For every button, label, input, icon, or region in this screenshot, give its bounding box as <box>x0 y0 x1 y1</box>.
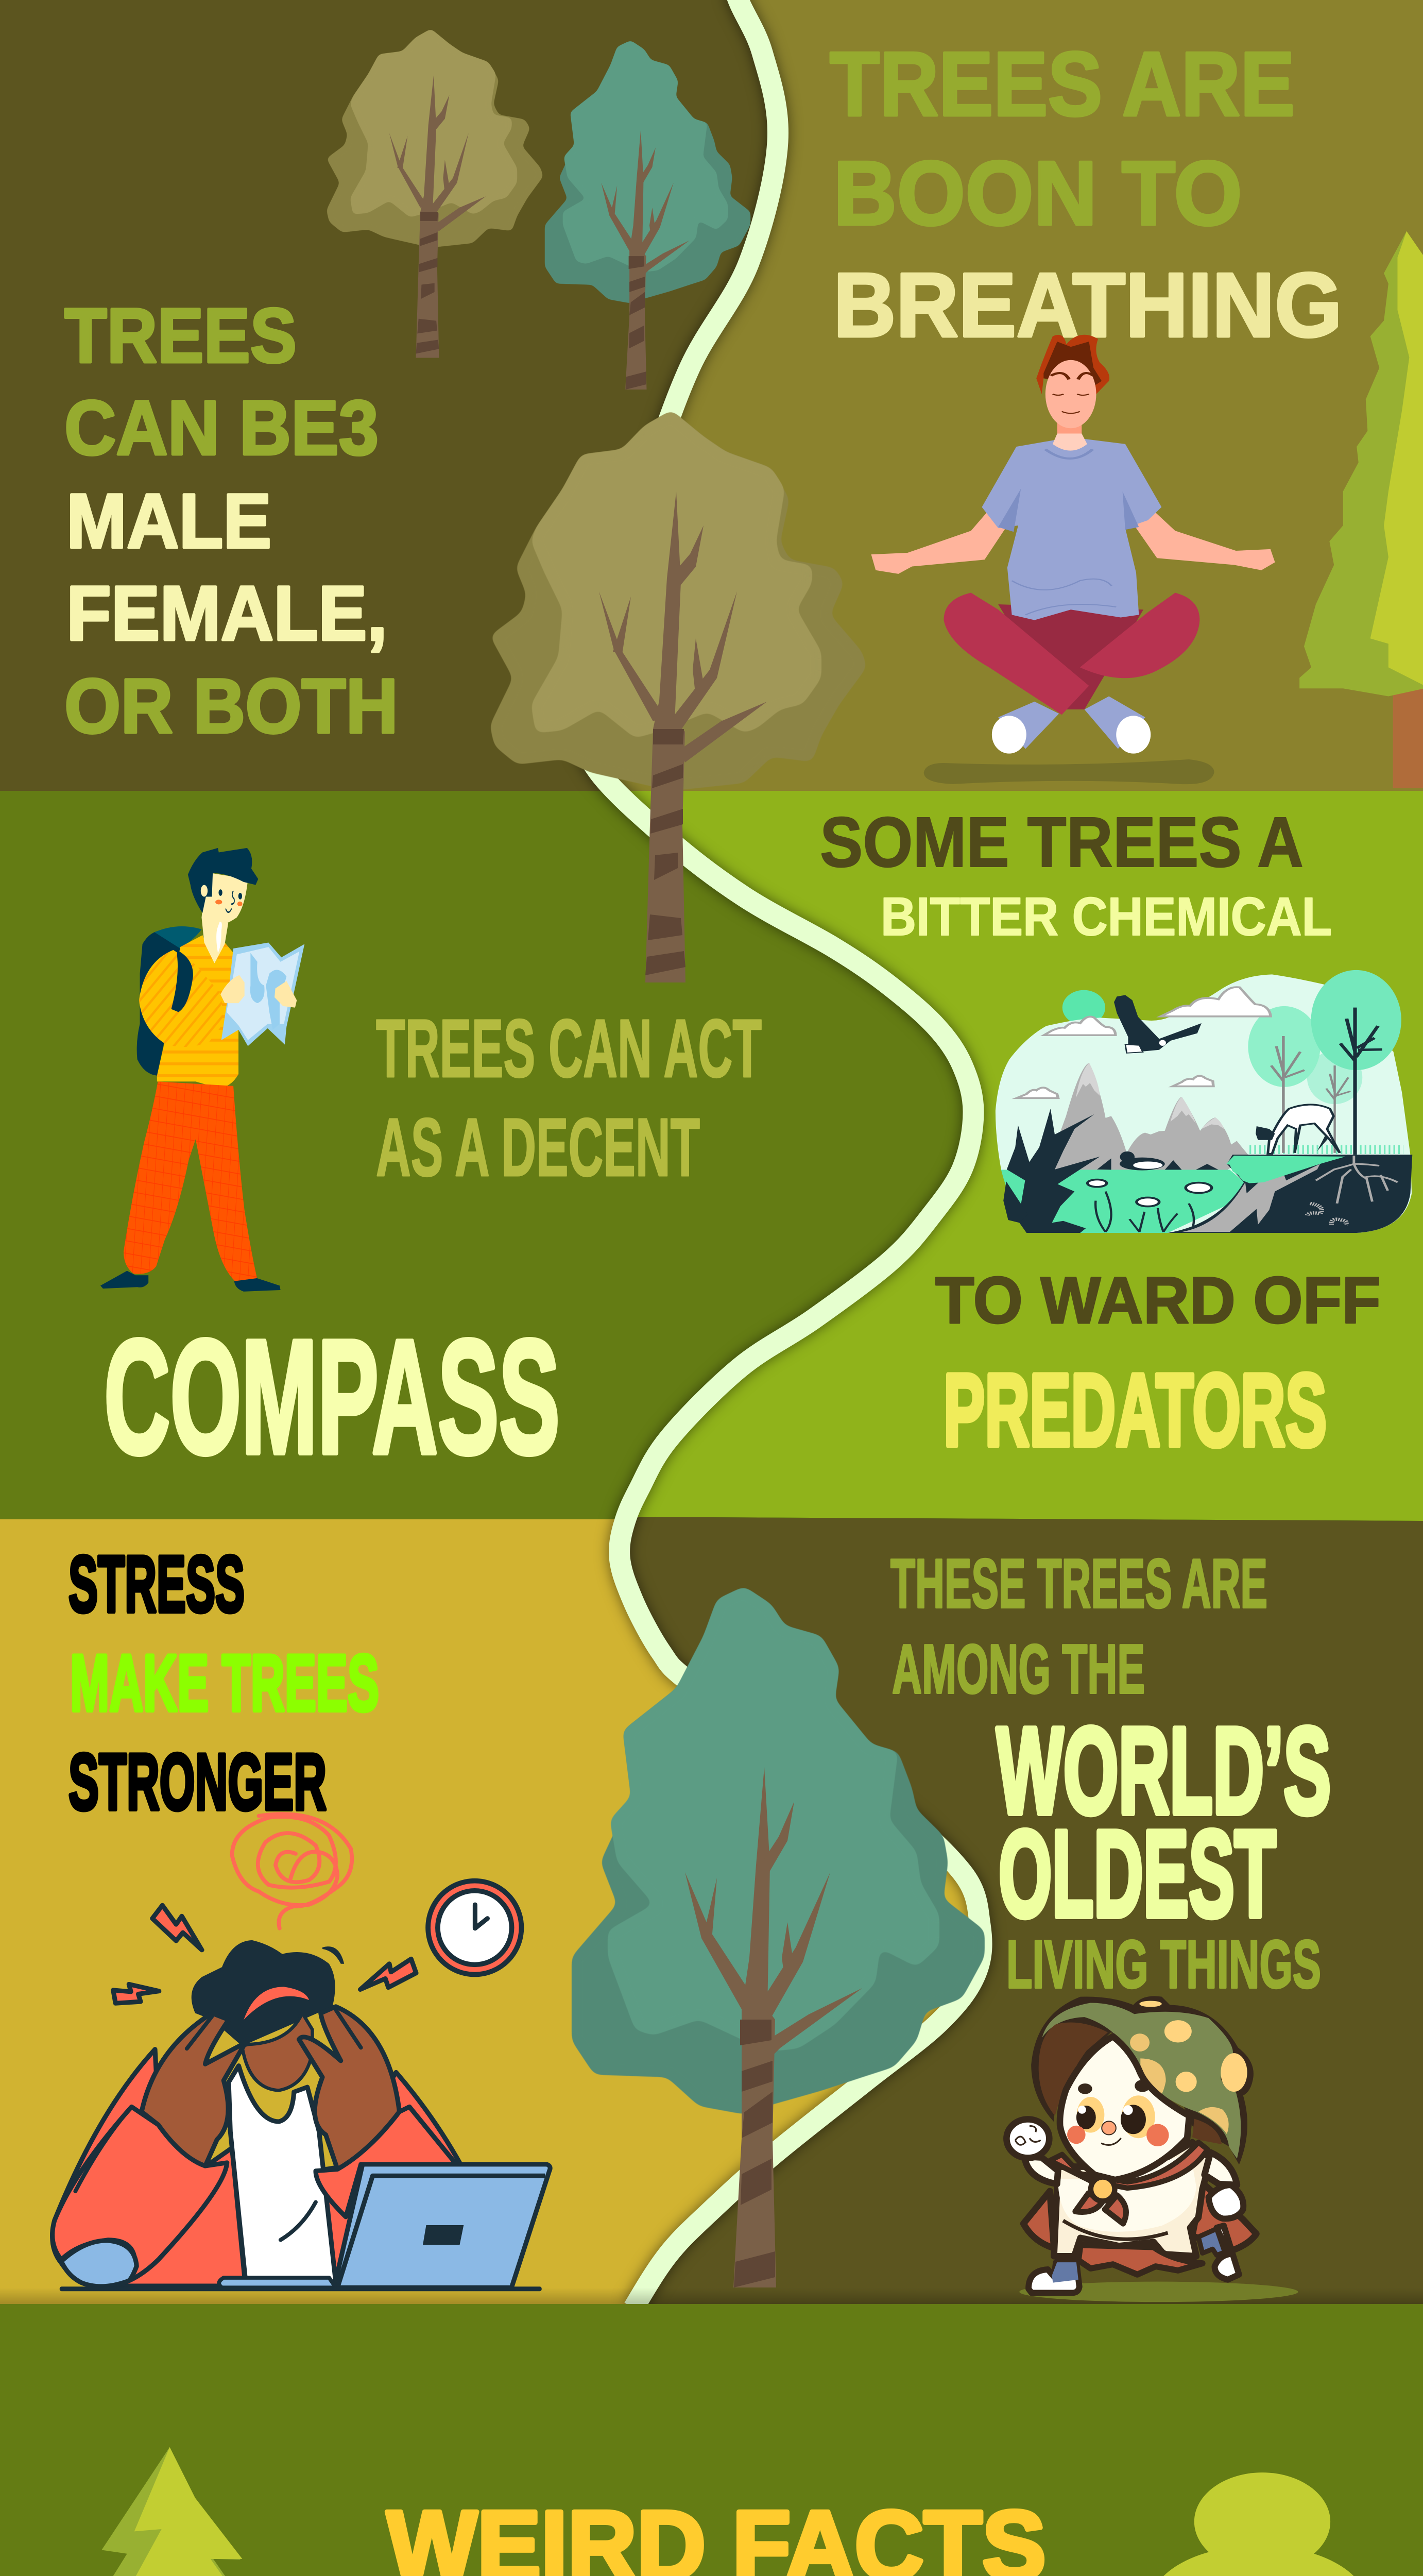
heading: stress make trees stronger <box>68 1539 379 1826</box>
heading: trees can act as a decent compass: COMPASS <box>104 1306 560 1487</box>
heading: some trees a bitter chemical to ward off predators <box>820 803 1381 1468</box>
heading: trees are boon to breathing: TREES ARE <box>830 33 1295 135</box>
heading: trees are boon to breathing: BREATHING <box>833 254 1342 356</box>
illustration: wetland ecosystem <box>996 970 1412 1233</box>
row 4 background <box>0 2304 1423 2576</box>
heading: trees can be male female or both: CAN BE3 <box>64 384 379 471</box>
heading: trees can be male female or both: OR BOTH <box>64 663 398 749</box>
heading: trees can act as a decent compass: AS A DECENT <box>376 1101 700 1193</box>
panel backgrounds: left side rows <box>0 0 968 2304</box>
tree: small teal <box>545 40 750 389</box>
illustration: meditating person <box>871 335 1275 784</box>
heading: some trees a bitter chemical to ward off predators: BITTER CHEMICAL <box>881 887 1332 947</box>
tree: large khaki <box>490 410 867 982</box>
heading: trees are boon to breathing: BOON TO <box>833 142 1242 244</box>
heading: trees can be male female or both: TREES <box>64 292 297 379</box>
winding path <box>582 0 982 2308</box>
heading: stress make trees stronger: MAKE TREES <box>70 1638 379 1727</box>
tree: yellow-green conifer <box>29 2447 299 2576</box>
heading: among the world's oldest living things <box>890 1545 1331 2002</box>
heading: stress make trees stronger: STRONGER <box>68 1737 327 1826</box>
heading: some trees a bitter chemical to ward off predators: SOME TREES A <box>820 803 1304 882</box>
row 3 bottom shade <box>0 2287 1423 2304</box>
heading: some trees a bitter chemical to ward off predators: TO WARD OFF <box>935 1264 1381 1337</box>
tree: rounded bush tree <box>1145 2472 1386 2576</box>
illustration: mushroom scout character <box>1006 1996 1298 2302</box>
heading: trees can act as a decent compass: TREES CAN ACT <box>376 1002 762 1094</box>
heading: stress make trees stronger: STRESS <box>68 1539 245 1629</box>
heading: trees are boon to breathing <box>830 33 1342 356</box>
heading: trees can act as a decent compass <box>104 1002 762 1487</box>
heading: trees can be male female or both: FEMALE, <box>66 570 387 656</box>
heading: among the world's oldest living things: AMONG THE <box>892 1630 1145 1708</box>
tree: small khaki <box>327 29 543 358</box>
illustration: hiker with map <box>100 848 304 1292</box>
tree: conifer at right edge <box>1299 231 1423 788</box>
tree: large teal <box>572 1586 985 2287</box>
heading: trees can be male female or both <box>64 292 398 749</box>
illustration: stressed person at laptop <box>53 1814 550 2291</box>
heading: trees can be male female or both: MALE <box>66 478 271 564</box>
